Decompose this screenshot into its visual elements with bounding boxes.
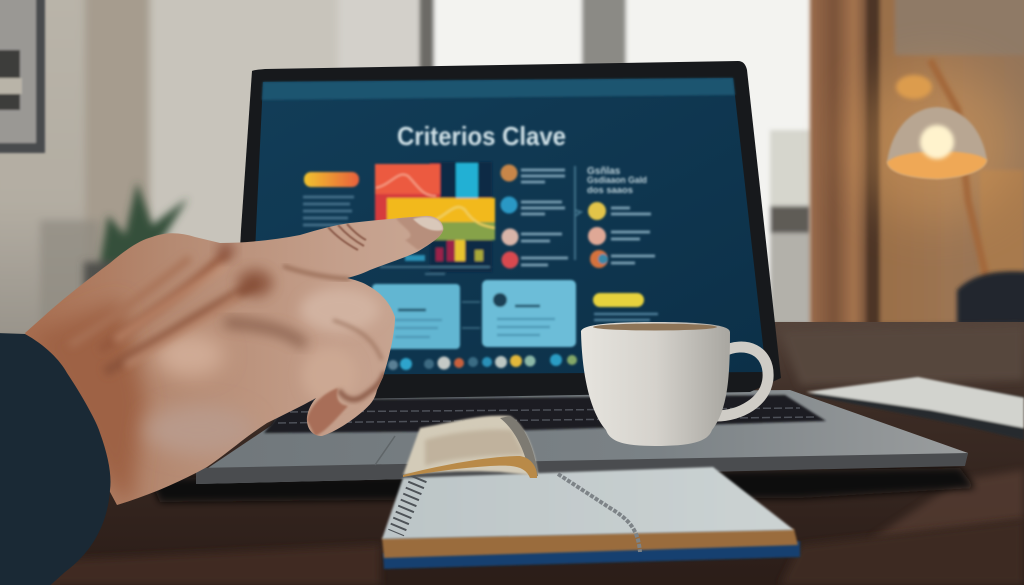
light back of hand [155,333,225,377]
screen title: Criterios Clave [397,121,566,151]
framed picture [0,0,45,153]
notebook spiral [396,478,419,533]
potted plant [84,182,188,292]
screen bottom icon row [388,354,577,370]
tendons [100,252,228,350]
hand shading [30,216,445,510]
fingernail [413,217,443,231]
dark sleeve [0,333,111,585]
screen yellow pill and text [593,293,658,320]
laptop lid bezel [232,61,781,400]
wooden table [40,322,1024,585]
notebook cover [383,541,800,569]
laptop [196,61,968,484]
screen right column [575,166,655,268]
laptop screen [250,78,766,375]
cup handle [716,347,768,416]
screen bar and area chart [375,162,495,274]
wrist warm tone [30,300,145,510]
screen right column: Gsñlas [587,166,621,177]
cup body [581,322,730,446]
spiral notebook [382,467,800,569]
curtain and warm wall [810,0,1024,325]
coffee surface [593,324,717,330]
notebook binding [558,474,640,552]
window [420,0,815,325]
notebook page [382,467,794,539]
table lamp with glowing light [850,60,1024,330]
screen left column [303,172,359,225]
screen right column: dos saaos [587,185,633,195]
background: room wall [0,0,430,340]
screen blue cards [372,280,576,349]
hand shape [25,216,443,505]
finger creases [333,320,382,360]
small open notebook [403,416,538,478]
coffee cup [581,322,768,446]
loose papers on the right [806,377,1024,440]
knuckles [237,269,273,297]
screen right column: Gsdiaaon Gald [587,175,647,185]
laptop base and keyboard [196,390,968,484]
hand pointing [25,216,445,510]
screen middle icon list [500,164,568,268]
